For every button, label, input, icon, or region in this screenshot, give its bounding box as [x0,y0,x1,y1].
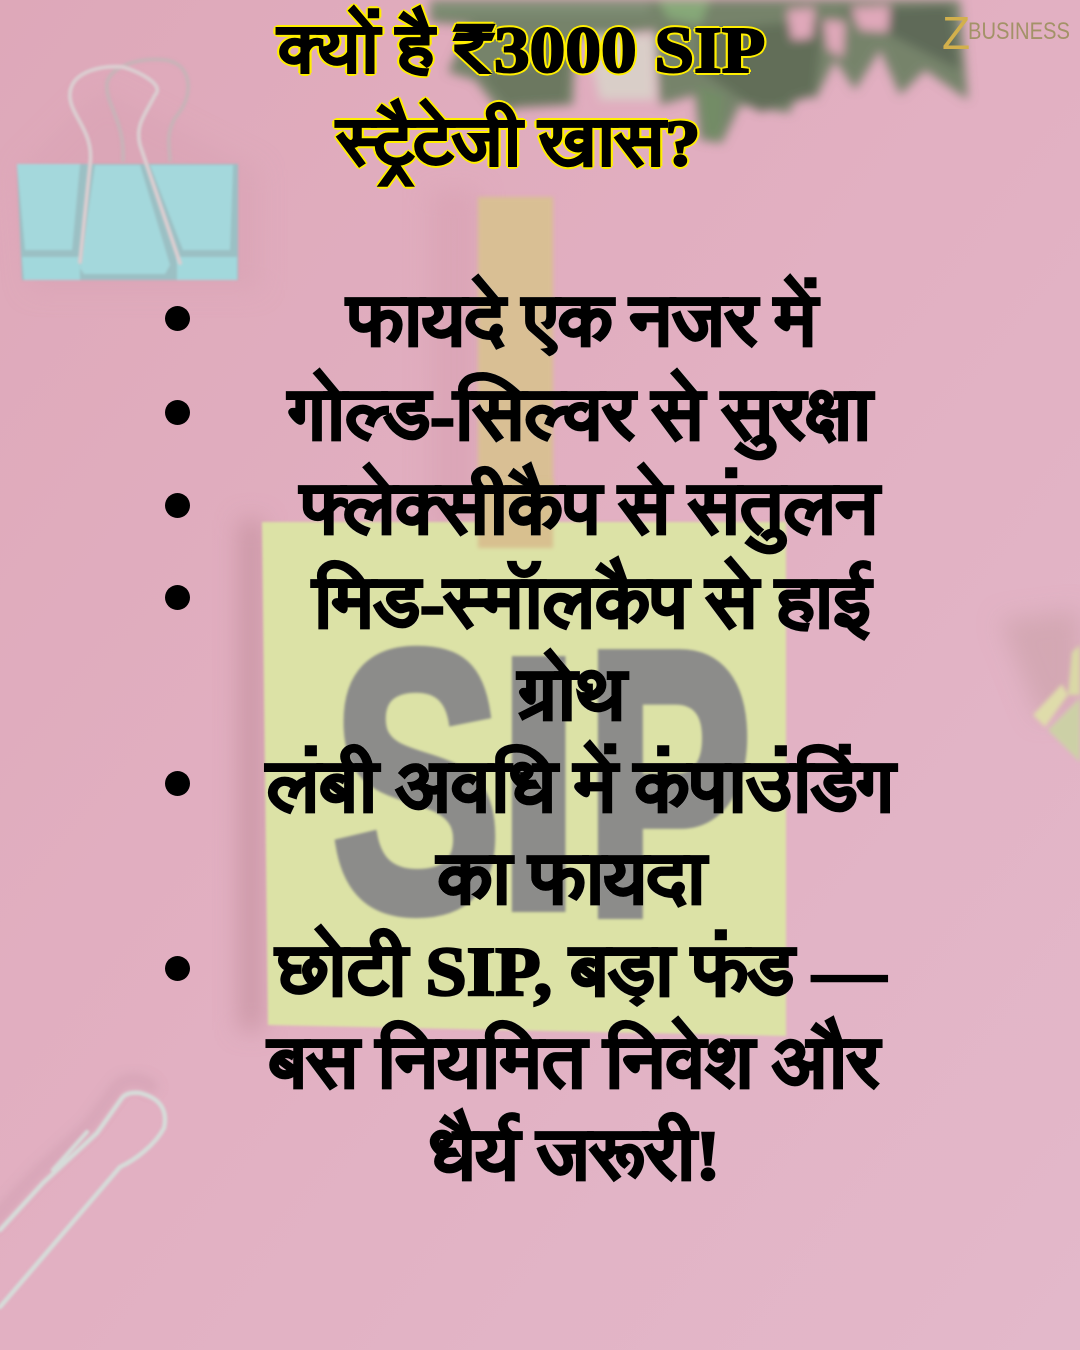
bullet 4: मिड-स्मॉलकैप से हाई [314,566,870,643]
bullet 5 [165,739,898,919]
bullet 2: गोल्ड-सिल्वर से सुरक्षा [289,378,872,455]
sticky note with SIP: I [487,575,590,991]
bullet 3 [165,461,882,554]
icon: wooden clothespin [478,197,553,547]
bullet 1: फायदे एक नजर में [348,284,817,361]
bullet 5: लंबी अवधि में कंपाउंडिंग [267,750,895,827]
bullet 3: फ्‍लेक्सीकैप से संतुलन [301,472,879,549]
bullet 2 [165,367,876,460]
title [273,2,766,189]
bullet 4: ग्रोथ [519,658,626,735]
sticky note with SIP [262,480,786,1036]
bullet 1 [165,273,821,780]
sticky note with SIP: P [586,575,751,991]
icon: plant leaves [430,0,968,143]
title: स्ट्रैटेजी खास? [337,107,701,180]
icon: blue binder clip [17,59,238,280]
bullet 4 [165,555,874,735]
bullet 5: का फायदा [438,842,706,919]
logo: Z Business: BUSINESS [968,18,1070,45]
soft shadows [20,90,1080,1030]
title: क्यों है ₹3000 SIP [279,14,765,87]
bullet 6: छोटी SIP, बड़ा फंड — [277,934,886,1011]
icon: corner object right [1033,645,1080,762]
logo: Z Business [942,7,1070,59]
sticky note with SIP: S [331,574,502,989]
bullet 6: धैर्य जरूरी! [430,1118,720,1195]
logo: Z Business: Z [942,7,970,59]
bullet 6: बस नियमित निवेश और [269,1026,879,1103]
icon: paperclip [0,1080,165,1307]
bullet list [165,273,898,1195]
bullet 6 [165,924,888,1195]
